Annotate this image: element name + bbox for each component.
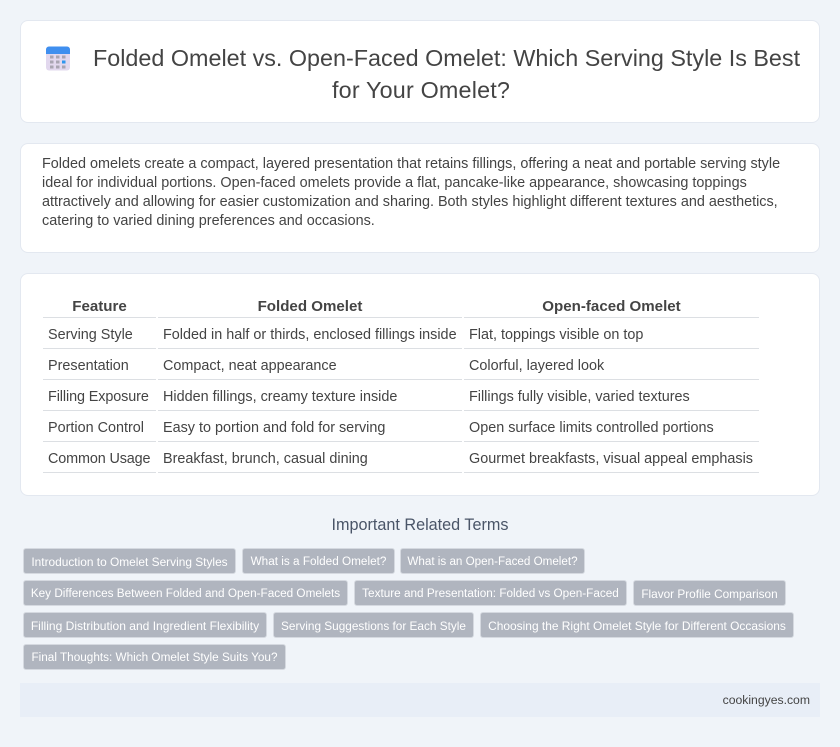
comparison table: Breakfast, brunch, casual dining <box>163 451 368 467</box>
related terms tags: Choosing the Right Omelet Style for Different Occasions <box>488 619 786 633</box>
related terms tags: Texture and Presentation: Folded vs Open-Faced <box>362 587 619 600</box>
related terms tags: Final Thoughts: Which Omelet Style Suits You? <box>31 651 278 664</box>
footer bar <box>20 683 820 717</box>
related terms tags <box>23 548 794 670</box>
heading line 2: for Your Omelet? <box>332 77 510 103</box>
heading <box>93 45 800 103</box>
related terms heading: Important Related Terms <box>332 516 508 534</box>
intro text <box>42 156 780 229</box>
related terms tags: Key Differences Between Folded and Open-Faced Omelets <box>31 587 340 600</box>
title card <box>20 20 820 123</box>
related terms tags: Serving Suggestions for Each Style <box>281 619 466 633</box>
comparison table: Gourmet breakfasts, visual appeal emphasis <box>469 451 753 467</box>
related terms tags: What is an Open-Faced Omelet? <box>407 555 578 568</box>
intro text: attractively and allowing for easier customization and sharing. Both styles highlight different textures and aesthetics, <box>42 194 778 210</box>
row: Portion Control: Portion Control <box>48 420 144 436</box>
row: Filling Exposure: Filling Exposure <box>48 389 149 405</box>
row: Serving Style: Serving Style <box>48 327 133 343</box>
row: Presentation: Presentation <box>48 358 129 374</box>
comparison table <box>43 298 759 473</box>
heading line 1: Folded Omelet vs. Open-Faced Omelet: Which Serving Style Is Best <box>93 45 800 71</box>
related terms tags: Flavor Profile Comparison <box>641 587 778 601</box>
comparison table: Flat, toppings visible on top <box>469 327 643 343</box>
intro text: Folded omelets create a compact, layered presentation that retains fillings, offering a neat and portable serving style <box>42 156 780 172</box>
comparison table: Hidden fillings, creamy texture inside <box>163 389 397 405</box>
panel: intro <box>20 143 820 253</box>
comparison table: Folded in half or thirds, enclosed fillings inside <box>163 327 457 343</box>
related terms tags: Filling Distribution and Ingredient Flexibility <box>31 619 259 633</box>
related terms tags: What is a Folded Omelet? <box>251 555 386 568</box>
comparison table: Fillings fully visible, varied textures <box>469 389 690 405</box>
comparison table: Easy to portion and fold for serving <box>163 420 385 436</box>
comparison table: Open surface limits controlled portions <box>469 420 714 436</box>
header: Folded Omelet: Folded Omelet <box>258 298 362 315</box>
comparison table: Colorful, layered look <box>469 358 604 374</box>
panel: comparison table <box>20 273 820 496</box>
comparison table: Compact, neat appearance <box>163 358 337 374</box>
related terms tags: Introduction to Omelet Serving Styles <box>31 555 228 569</box>
header: Feature: Feature <box>72 298 127 315</box>
intro text: catering to varied dining preferences and occasions. <box>42 213 375 229</box>
icon: calendar <box>46 46 70 70</box>
intro text: ideal for individual portions. Open-faced omelets provide a flat, pancake-like appearance, showcasing toppings <box>42 175 747 191</box>
row: Common Usage: Common Usage <box>48 451 150 467</box>
header: Open-faced Omelet: Open-faced Omelet <box>542 298 681 315</box>
footer credit: cookingyes.com <box>723 693 810 707</box>
